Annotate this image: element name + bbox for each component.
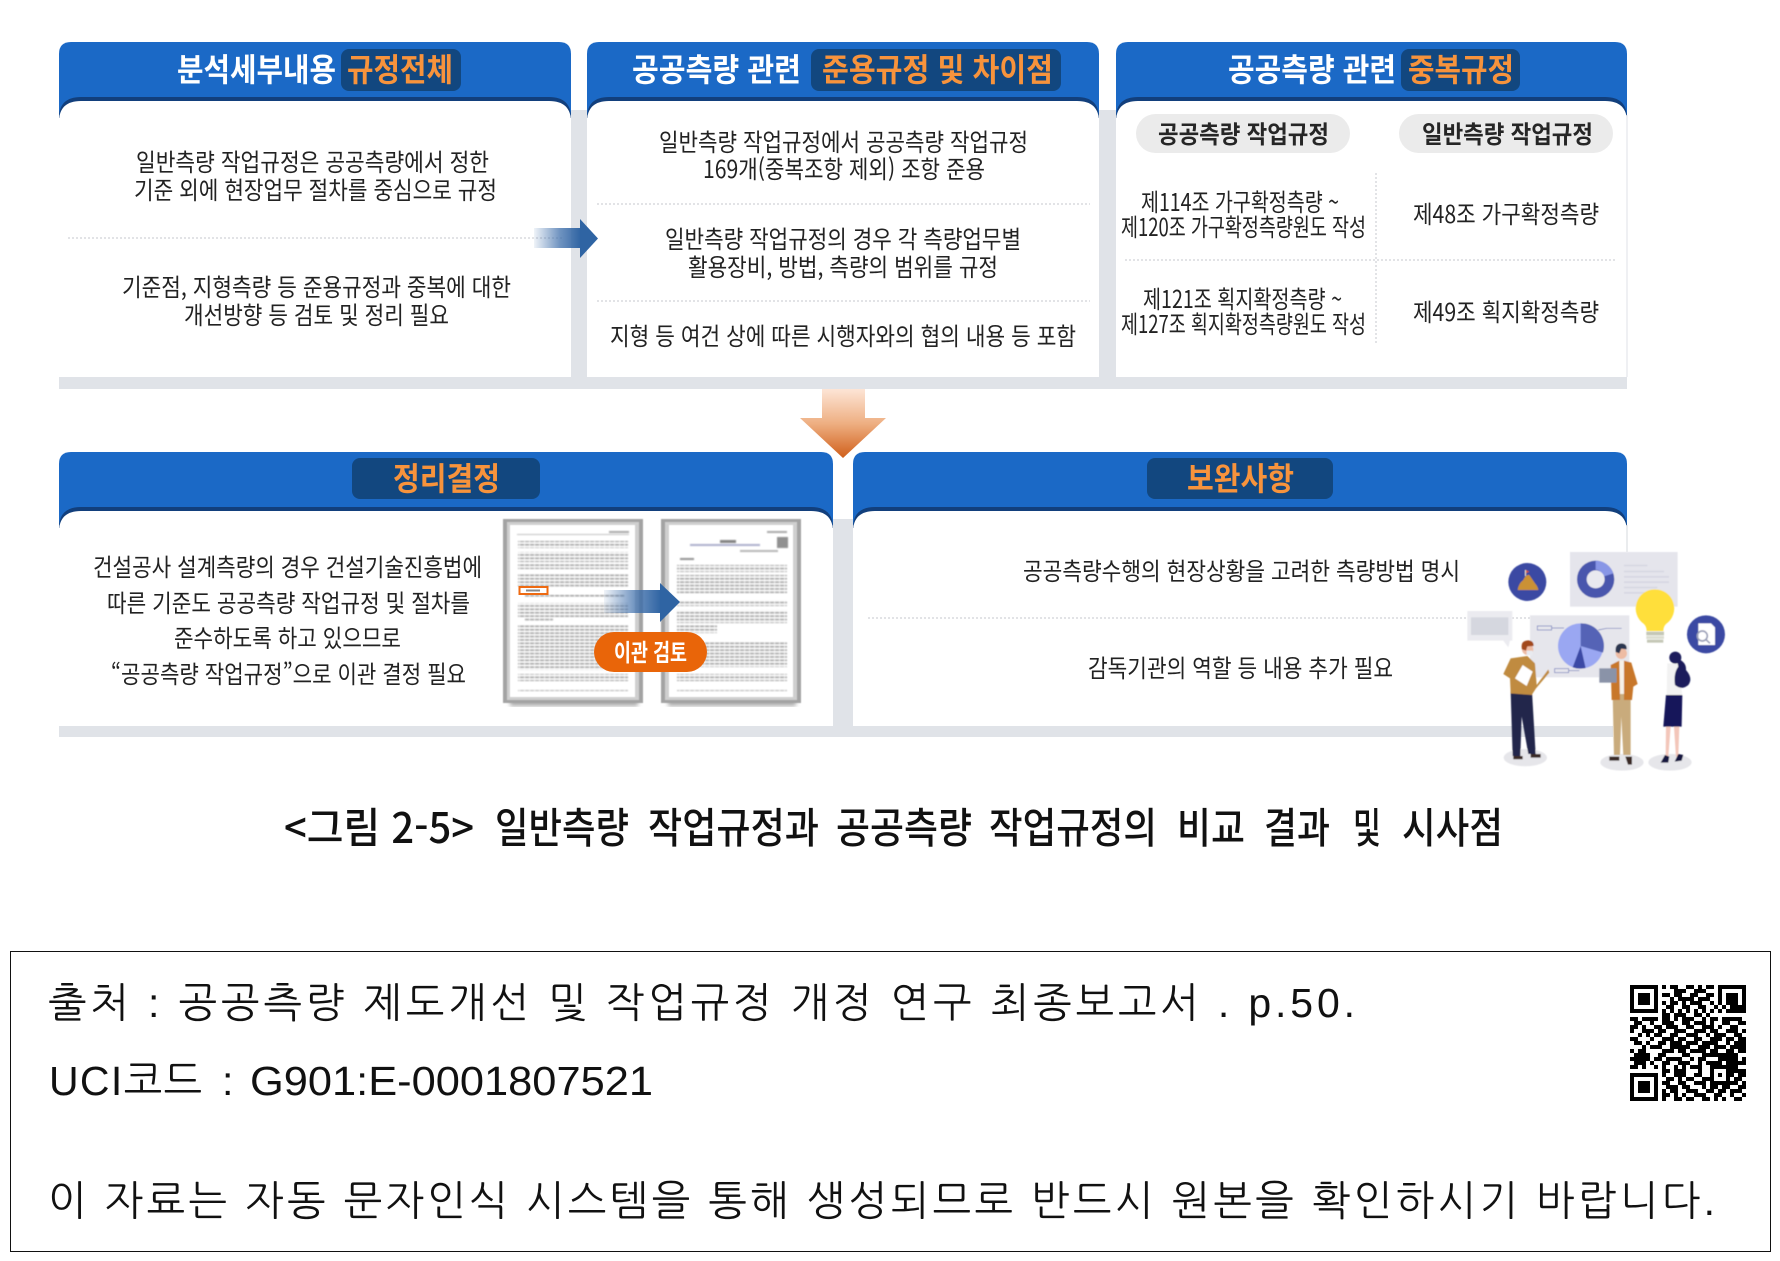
heading: 보완사항 — [1147, 454, 1333, 500]
heading: 공공측량 관련 준용규정 및 차이점: 준용규정 및 차이점 — [822, 45, 1053, 91]
UCI code: G901:E-0001807521 — [250, 1058, 653, 1104]
heading: 공공측량 관련 준용규정 및 차이점: 공공측량 관련 — [632, 45, 801, 91]
card: donut chart — [1570, 552, 1678, 607]
source box — [10, 952, 1770, 1252]
icon: light bulb — [1636, 589, 1674, 643]
arrow: between documents — [604, 583, 680, 622]
caption — [284, 795, 1503, 856]
text block: 이관 결정: “공공측량 작업규정”으로 이관 결정 필요 — [111, 656, 466, 691]
heading: 공공측량 관련 중복규정: 중복규정 — [1408, 45, 1514, 91]
heading: 보완사항: 보완사항 — [1187, 454, 1294, 500]
illustration: people reviewing charts — [1467, 552, 1725, 771]
panel: 분석세부내용 규정전체 — [59, 42, 571, 377]
grey backing bars and gaps — [59, 110, 1627, 737]
caption: 공공측량 — [836, 795, 972, 856]
figure: man with laptop — [1599, 643, 1644, 771]
card: pie chart — [1530, 615, 1629, 677]
text block: 이관 결정 — [93, 549, 482, 691]
icon: mountain flag — [1508, 563, 1546, 601]
icon: document search — [1687, 615, 1725, 653]
table row: 가구확정측량: 제114조 가구확정측량 ~ — [1141, 184, 1339, 219]
text block: 준용 조항 — [659, 124, 1028, 186]
panel: 공공측량 관련 중복규정 — [1116, 42, 1627, 377]
text block: 측량업무별 규정 — [665, 221, 1021, 284]
table row: 가구확정측량: 제120조 가구확정측량원도 작성 — [1121, 209, 1366, 244]
heading: 분석세부내용 규정전체: 규정전체 — [347, 45, 453, 91]
arrow: panel 1 to panel 2 — [534, 219, 598, 258]
caption: 시사점 — [1402, 795, 1503, 856]
speech bubble — [1467, 611, 1512, 647]
caption: 작업규정의 — [989, 795, 1157, 856]
text block: 시행자 협의: 지형 등 여건 상에 따른 시행자와의 협의 내용 등 포함 — [610, 318, 1076, 353]
table row: 획지확정측량: 제121조 획지확정측량 ~ — [1143, 281, 1342, 316]
text block: 일반측량 작업규정 설명: 기준 외에 현장업무 절차를 중심으로 규정 — [134, 172, 497, 207]
caption: 작업규정과 — [648, 795, 819, 856]
text block: 이관 결정: 준수하도록 하고 있으므로 — [174, 620, 401, 655]
heading: 분석세부내용 규정전체 — [177, 45, 461, 91]
text block: 개선방향 — [122, 269, 511, 332]
figure: woman — [1648, 652, 1692, 771]
text block: 일반측량 작업규정 설명 — [134, 144, 497, 207]
table row: 획지확정측량: 제127조 획지확정측량원도 작성 — [1121, 306, 1366, 341]
table row: 가구확정측량 — [1121, 184, 1599, 244]
table row: 획지확정측량: 제49조 획지확정측량 — [1413, 294, 1599, 329]
UCI code: : — [222, 1058, 233, 1104]
text block: 이관 결정: 건설공사 설계측량의 경우 건설기술진흥법에 — [93, 549, 482, 584]
heading: 공공측량 관련 준용규정 및 차이점 — [632, 45, 1061, 91]
text block: 일반측량 작업규정 설명: 일반측량 작업규정은 공공측량에서 정한 — [136, 144, 489, 179]
caption: <그림 2-5> — [284, 795, 474, 856]
column header: 공공측량 작업규정: 공공측량 작업규정 — [1158, 116, 1329, 151]
text block: 측량업무별 규정: 일반측량 작업규정의 경우 각 측량업무별 — [665, 221, 1021, 256]
table row: 가구확정측량: 제48조 가구확정측량 — [1413, 196, 1599, 231]
heading: 공공측량 관련 중복규정 — [1228, 45, 1520, 91]
caption: 및 — [1353, 795, 1381, 856]
caption: 비교 — [1177, 795, 1245, 856]
text block: 준용 조항: 일반측량 작업규정에서 공공측량 작업규정 — [659, 124, 1028, 159]
panel: 정리결정 — [59, 452, 833, 726]
figure: man with paper — [1503, 640, 1549, 766]
text block: 측량업무별 규정: 활용장비, 방법, 측량의 범위를 규정 — [688, 249, 998, 284]
heading: 정리결정 — [352, 454, 540, 500]
caption: 일반측량 — [495, 795, 629, 856]
heading: 분석세부내용 규정전체: 분석세부내용 — [177, 45, 336, 91]
heading: 공공측량 관련 중복규정: 공공측량 관련 — [1228, 45, 1396, 91]
panel: 공공측량 관련 준용규정 및 차이점 — [587, 42, 1099, 377]
panel: 보완사항 — [853, 452, 1627, 726]
document thumbnail: right — [661, 519, 801, 706]
text block: 개선방향: 개선방향 등 검토 및 정리 필요 — [184, 297, 449, 332]
text block: 개선방향: 기준점, 지형측량 등 준용규정과 중복에 대한 — [122, 269, 511, 304]
text block: 준용 조항: 169개(중복조항 제외) 조항 준용 — [703, 151, 985, 186]
column header: 일반측량 작업규정: 일반측량 작업규정 — [1422, 116, 1593, 151]
badge: 이관 검토: 이관 검토 — [614, 633, 687, 668]
source line: 출처 : 공공측량 제도개선 및 작업규정 개정 연구 최종보고서 . p.50. — [48, 980, 1355, 1026]
caption: 결과 — [1264, 795, 1330, 856]
text block: 이관 결정: 따른 기준도 공공측량 작업규정 및 절차를 — [107, 585, 470, 620]
UCI code — [49, 1058, 653, 1104]
heading: 정리결정: 정리결정 — [393, 454, 500, 500]
text block: 측량방법 명시: 공공측량수행의 현장상황을 고려한 측량방법 명시 — [1023, 553, 1460, 588]
QR code — [1630, 987, 1746, 1099]
table row: 획지확정측량 — [1121, 281, 1599, 341]
text block: 감독기관 역할: 감독기관의 역할 등 내용 추가 필요 — [1088, 650, 1393, 685]
notice: 이 자료는 자동 문자인식 시스템을 통해 생성되므로 반드시 원본을 확인하시기 바랍니다. — [48, 1178, 1715, 1224]
document thumbnail: left — [503, 519, 643, 706]
UCI code: UCI코드 — [49, 1058, 202, 1104]
arrow: down to conclusions — [800, 389, 886, 458]
